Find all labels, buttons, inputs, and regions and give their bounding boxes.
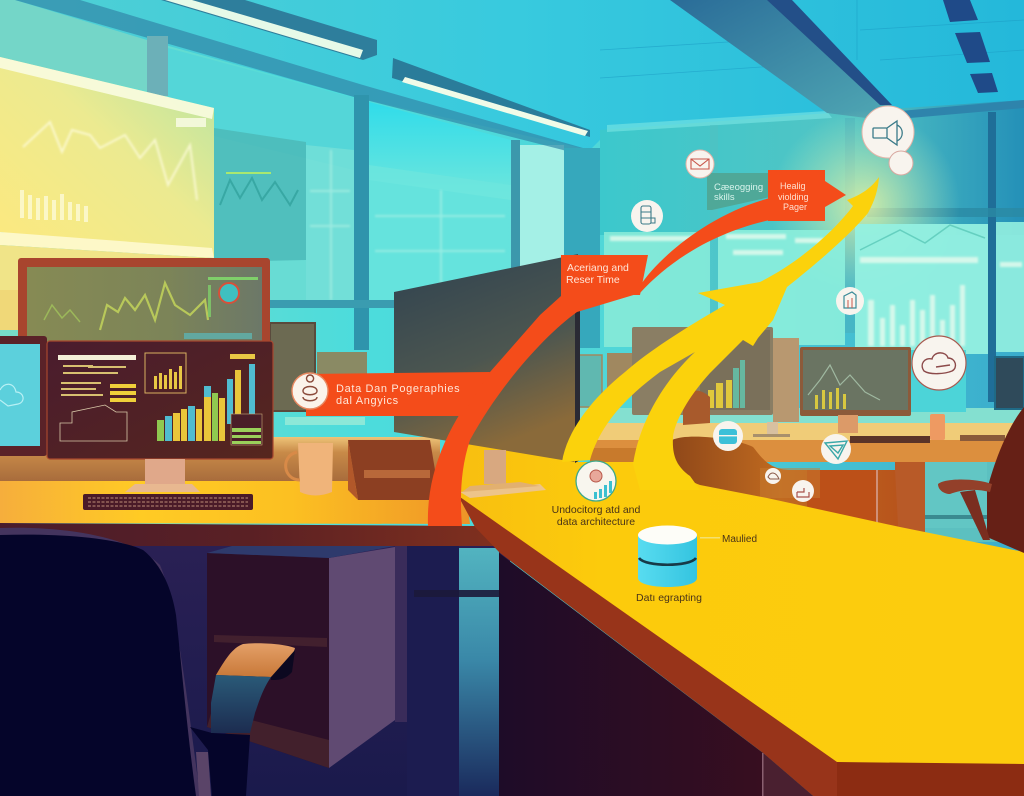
- coffee mug: [286, 443, 333, 496]
- red label: reaction time: Reser Time: [566, 274, 620, 286]
- icon: database cylinder: [638, 526, 697, 587]
- wall screens: [0, 57, 214, 257]
- red label: reaction time: [561, 255, 648, 295]
- icon: megaphone: [862, 106, 914, 158]
- right wall screens and bars: [604, 222, 1024, 354]
- background right monitors: [632, 327, 1024, 443]
- mid-ground chair and desk block: [660, 437, 900, 560]
- label: Maulied: [700, 534, 757, 545]
- yellow arrow to the top right: [562, 177, 879, 490]
- red ribbon label: data geographies: [306, 372, 490, 416]
- icon: funnel: [821, 434, 851, 464]
- icon: data coil: [292, 373, 328, 409]
- monitor stand: [125, 459, 200, 492]
- red arrow label: landing pages: violding: [778, 192, 809, 202]
- caption: data architecture: Undocitorg atd and: [552, 504, 641, 516]
- icon: small tag: [765, 468, 781, 484]
- red arrow label: landing pages: Pager: [783, 202, 807, 212]
- teal label: campaigning skills: skills: [714, 192, 735, 203]
- caption: data engraving: Datı egrapting: [636, 592, 702, 604]
- icon: cloud: [912, 336, 966, 390]
- icon: envelope: [686, 150, 714, 178]
- red ribbon label: data geographies: Data Dan Pogeraphies: [336, 383, 460, 395]
- teal label: campaigning skills: [707, 173, 770, 210]
- desk box: [348, 440, 440, 500]
- teal label: campaigning skills: Cæeogging: [714, 182, 763, 193]
- red ribbon: [428, 198, 770, 526]
- icon: small hand: [792, 480, 814, 502]
- caption: data architecture: data architecture: [557, 516, 635, 528]
- back right desk: [578, 353, 1024, 542]
- background monitors, left: [270, 300, 395, 425]
- label: Maulied: Maulied: [722, 534, 757, 545]
- red arrow label: landing pages: Healig: [780, 181, 806, 191]
- keyboard: [83, 494, 253, 510]
- back left monitor with line chart: [18, 258, 270, 348]
- left tablet with cloud: [0, 336, 47, 456]
- back left desk strip: [0, 437, 440, 481]
- large foreground desk: left: [0, 481, 500, 546]
- center monitor: [394, 254, 580, 498]
- red ribbon label: data geographies: dal Angyics: [336, 395, 399, 407]
- small white dot: [889, 151, 913, 175]
- chair, lower left: [0, 528, 295, 796]
- icon: database document: [631, 200, 663, 232]
- icon: analysis chart circle: [576, 461, 616, 501]
- icon: database disc: [713, 421, 743, 451]
- right office chair: [938, 407, 1024, 553]
- foreground floor and pedestal: [0, 540, 510, 796]
- red label: reaction time: Aceriang and: [567, 262, 629, 274]
- caption: data architecture: [552, 504, 641, 528]
- front monitor with bar chart: [47, 341, 273, 459]
- red arrow label: landing pages: [768, 170, 846, 221]
- icon: chart document: [836, 287, 864, 315]
- large yellow desk: [455, 440, 1024, 796]
